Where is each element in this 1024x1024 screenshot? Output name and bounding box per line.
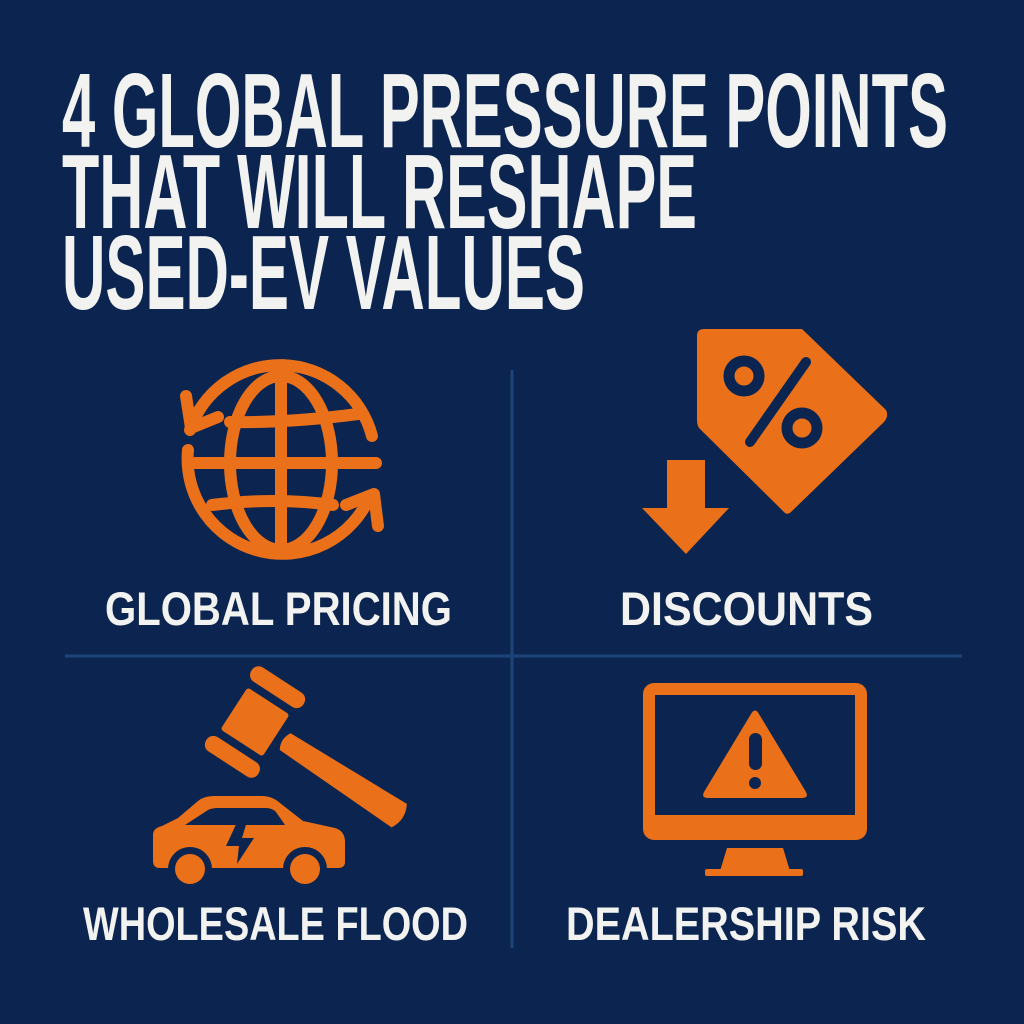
label: discounts: DISCOUNTS bbox=[620, 582, 873, 635]
icon: gavel bbox=[202, 663, 430, 860]
icon: globe bbox=[186, 365, 378, 554]
label: wholesale flood: WHOLESALE FLOOD bbox=[83, 897, 468, 950]
title bbox=[62, 52, 948, 332]
panel: global pricing bbox=[105, 365, 452, 635]
label: global pricing: GLOBAL PRICING bbox=[105, 582, 452, 635]
panel: wholesale flood bbox=[83, 663, 468, 950]
title: USED-EV VALUES bbox=[62, 214, 585, 332]
panel: dealership risk bbox=[566, 683, 926, 950]
panel: discounts bbox=[620, 329, 887, 635]
icon: down arrow bbox=[642, 460, 729, 554]
label: dealership risk: DEALERSHIP RISK bbox=[566, 897, 926, 950]
icon: electric car bbox=[153, 796, 345, 891]
icon: price tag bbox=[697, 329, 887, 514]
icon: monitor warning bbox=[643, 683, 867, 876]
